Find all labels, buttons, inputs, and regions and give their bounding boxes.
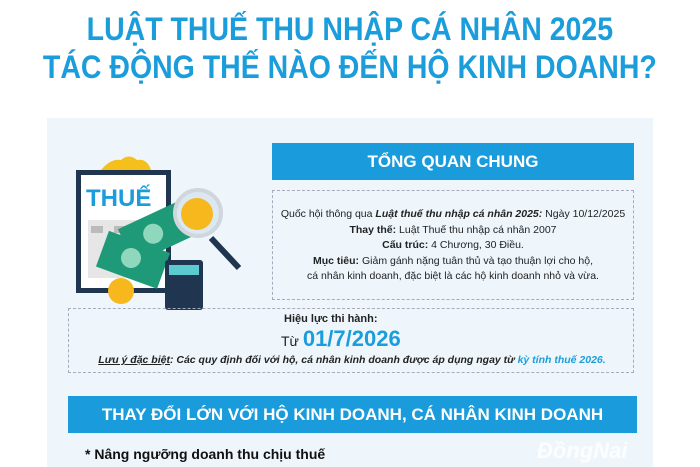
text block: overview: Quốc hội thông qua Luật thuế thu nhập cá nhân 2025: Ngày 10/12/2025 bbox=[281, 208, 625, 220]
heading: tong quan chung: TỔNG QUAN CHUNG bbox=[368, 152, 538, 171]
panel: main bbox=[47, 118, 653, 467]
illustration: tax clipboard: THUẾ bbox=[86, 184, 151, 212]
text block: overview: Thay thế: Luật Thuế thu nhập cá nhân 2007 bbox=[349, 224, 557, 236]
heading: thay doi lon: THAY ĐỔI LỚN VỚI HỘ KINH DOANH, CÁ NHÂN KINH DOANH bbox=[102, 405, 603, 424]
illustration: tax clipboard bbox=[76, 156, 242, 310]
title: LUẬT THUẾ THU NHẬP CÁ NHÂN 2025 bbox=[87, 11, 613, 47]
heading: thay doi lon bbox=[68, 396, 637, 433]
text block: overview bbox=[272, 190, 634, 300]
text block: effective date: Hiệu lực thi hành: bbox=[284, 313, 378, 325]
heading: tong quan chung bbox=[272, 143, 634, 180]
logo: DongNai online: ĐồngNai bbox=[537, 438, 627, 463]
text block: effective date bbox=[68, 308, 634, 373]
text block: overview: Mục tiêu: Giảm gánh nặng tuân thủ và tạo thuận lợi cho hộ, bbox=[313, 254, 593, 266]
text block: overview: cá nhân kinh doanh, đặc biệt là các hộ kinh doanh nhỏ và vừa. bbox=[307, 270, 599, 282]
text block: effective date: Lưu ý đặc biệt: Các quy định đối với hộ, cá nhân kinh doanh được áp dụng ngay từ kỳ tính thuế 2026. bbox=[98, 354, 606, 366]
text block: overview: Cấu trúc: 4 Chương, 30 Điều. bbox=[382, 239, 524, 251]
text block: subheading: * Nâng ngưỡng doanh thu chịu thuế bbox=[85, 446, 325, 462]
title bbox=[43, 11, 657, 85]
text block: effective date: Từ 01/7/2026 bbox=[281, 326, 401, 351]
title: TÁC ĐỘNG THẾ NÀO ĐẾN HỘ KINH DOANH? bbox=[43, 49, 657, 85]
